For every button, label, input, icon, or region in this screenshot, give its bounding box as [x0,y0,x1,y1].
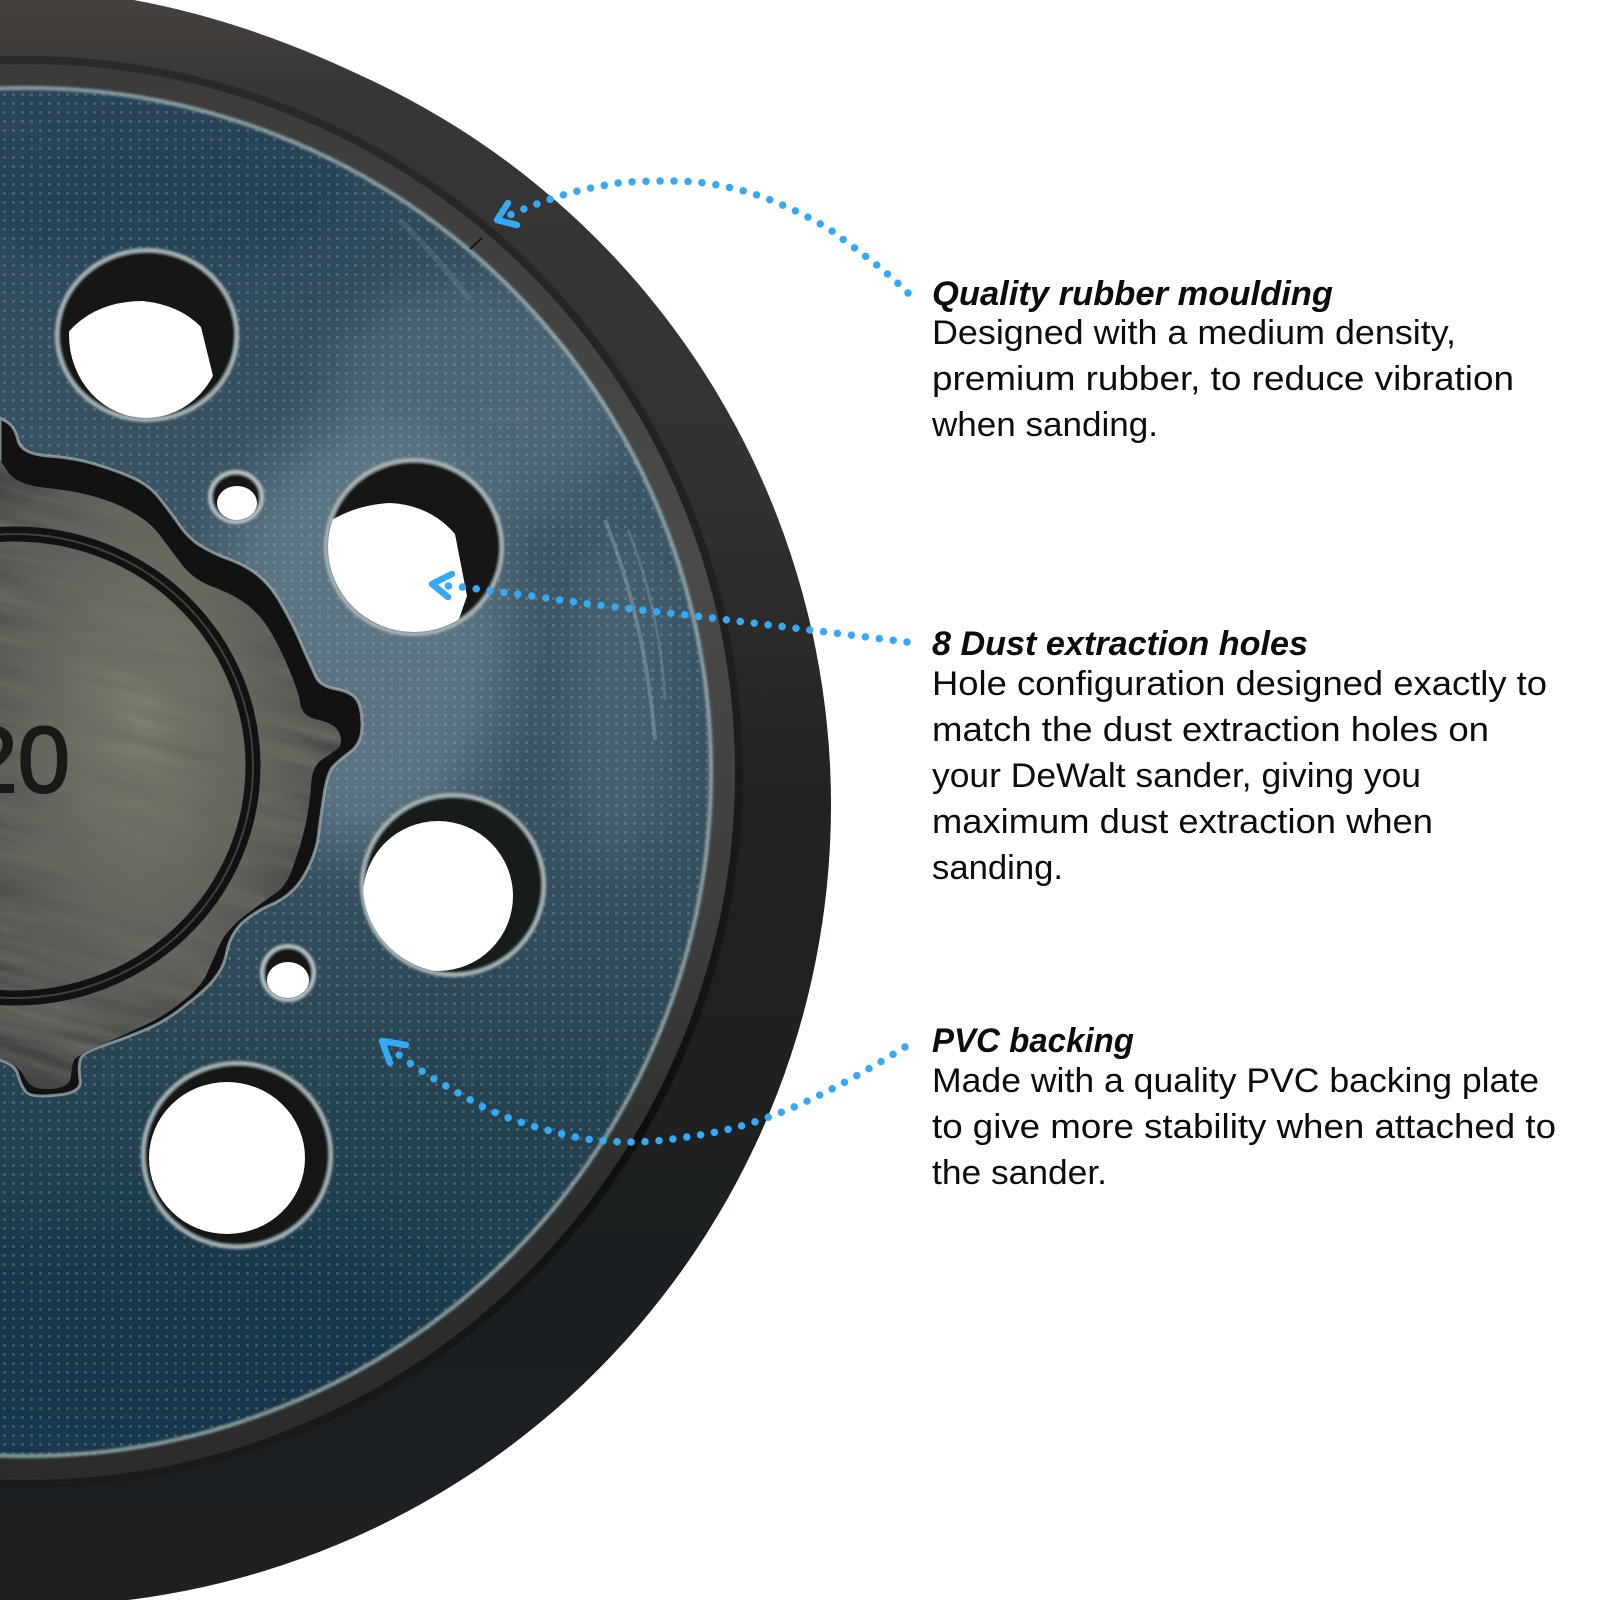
recessed rubber ring [0,56,743,1488]
description: to give more stability when attached to [932,1108,1556,1146]
small hole upper [210,472,262,522]
heading: 8 Dust extraction holes [932,625,1308,663]
heading: PVC backing [932,1022,1134,1060]
description: match the dust extraction holes on [932,711,1489,749]
dust hole 3 [362,795,544,975]
description [931,314,1514,444]
description: premium rubber, to reduce vibration [932,360,1514,398]
description: Designed with a medium density, [932,314,1456,352]
heading: Quality rubber moulding [932,275,1333,313]
arrow: PVC backing callout [382,1041,905,1142]
description: when sanding. [931,406,1158,444]
dust hole 1 [57,250,237,425]
small hole lower [262,946,314,1000]
o-ring [0,534,253,998]
arrow: rubber moulding callout [497,181,908,293]
description: Hole configuration designed exactly to [932,665,1547,703]
PVC backing plate [0,60,740,1480]
text block: quality rubber moulding [931,275,1514,444]
text block: dust extraction holes [932,625,1547,887]
description: sanding. [932,849,1063,887]
arrow: dust holes callout [432,574,907,642]
notch in rubber ring [470,238,482,249]
description: Made with a quality PVC backing plate [932,1062,1539,1100]
description [932,1062,1556,1192]
text block: PVC backing [932,1022,1556,1192]
rubber rim [0,0,831,1600]
description: your DeWalt sander, giving you [932,757,1421,795]
product photo: rubber sanding pad [0,0,831,1600]
description [932,665,1547,887]
central hub with groove [0,416,364,1098]
dust hole 4 [143,1063,331,1247]
description: the sander. [932,1154,1107,1192]
dust hole 2 [320,460,502,640]
description: maximum dust extraction when [932,803,1433,841]
